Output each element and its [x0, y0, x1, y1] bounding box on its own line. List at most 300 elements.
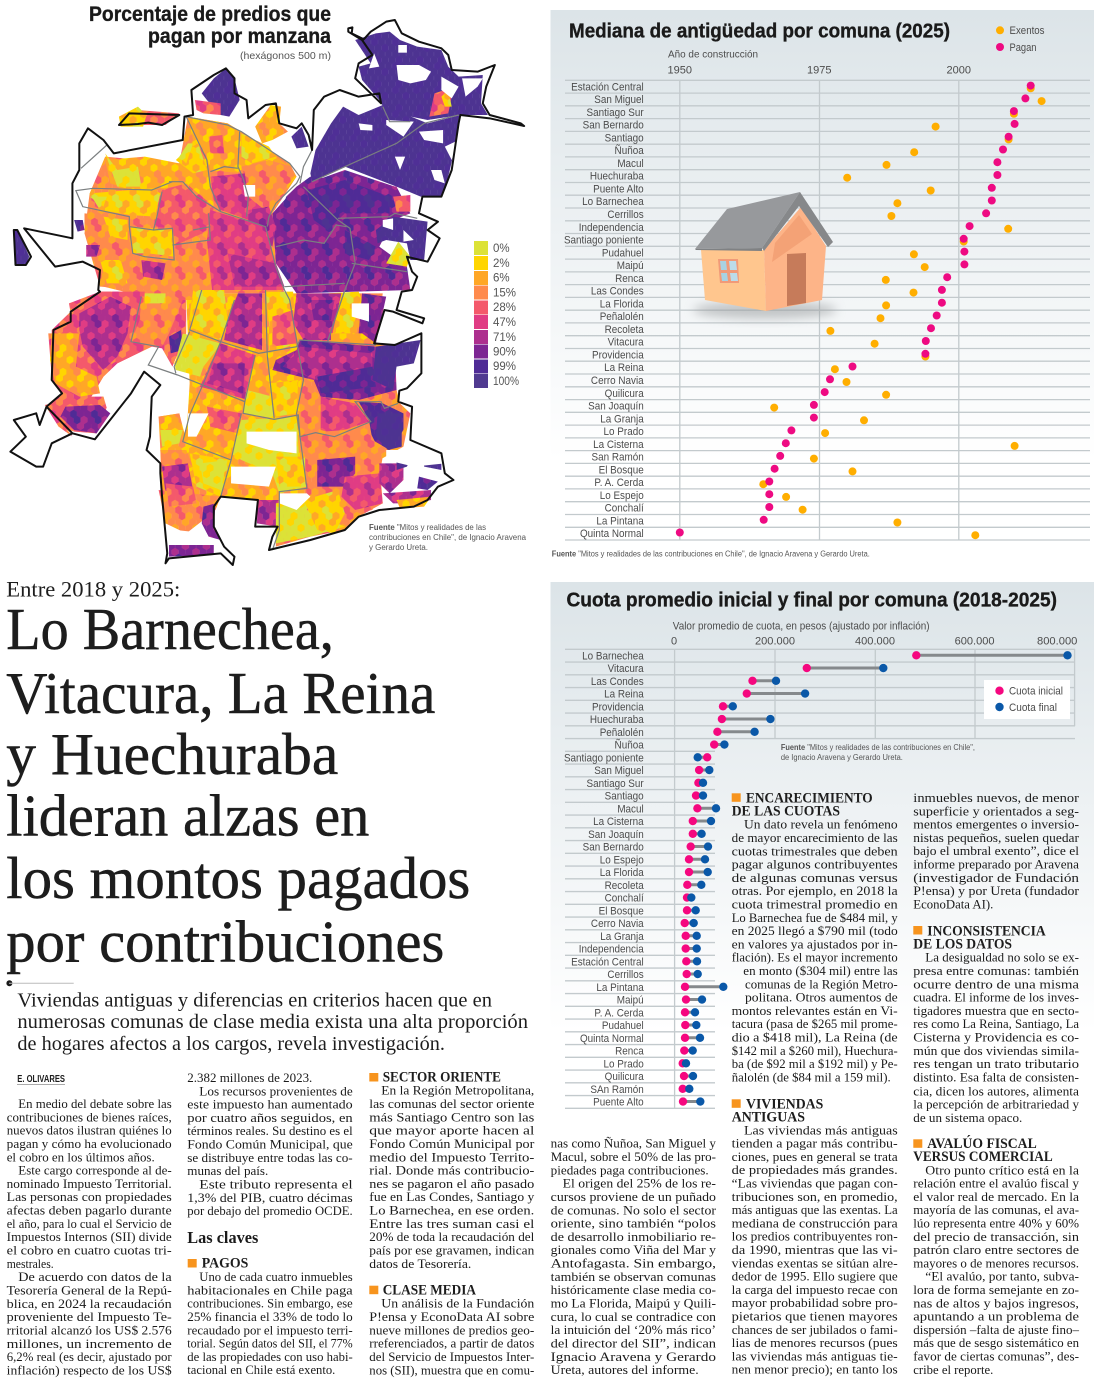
text column 1: blica, en 2024 la recaudación	[7, 1296, 172, 1311]
commune labels: Independencia	[579, 222, 644, 234]
text column 1: pagan y cómo ha evolucionado	[7, 1136, 172, 1151]
commune labels: Santiago Sur	[587, 778, 644, 790]
commune labels: Estación Central	[571, 957, 644, 968]
subheading: VIVIENDAS ANTIGUAS: VIVIENDAS	[746, 1096, 823, 1112]
text column 4: Antofagasta. Sin embargo,	[551, 1256, 716, 1270]
commune labels: Quilicura	[605, 1072, 644, 1083]
commune labels: Pudahuel	[602, 248, 644, 259]
commune labels: Lo Espejo	[600, 855, 644, 866]
commune labels: El Bosque	[599, 906, 644, 917]
chart legend: Cuota final	[1009, 702, 1057, 714]
text column 4: históricamente clase media co-	[551, 1282, 716, 1297]
subheading: VIVIENDAS ANTIGUAS	[732, 1096, 823, 1126]
kicker: Entre 2018 y 2025:	[6, 577, 180, 602]
commune labels: Ñuñoa	[615, 144, 644, 157]
axis labels: Valor promedio de cuota, en pesos (ajustado por inflación)	[673, 620, 930, 632]
commune boundaries	[76, 107, 459, 550]
text column 5: ñalolén (de $84 mil a 159 mil).	[732, 1069, 891, 1084]
commune labels: Maipú	[617, 995, 644, 1007]
text column 5: tribuciones son, en promedio,	[732, 1189, 898, 1204]
commune labels: La Reina	[604, 363, 644, 374]
text column 3: P!ensa y EconoData AI sobre	[369, 1309, 535, 1324]
commune labels: La Florida	[600, 299, 644, 311]
text column 5: tacura (pasa de $265 mil prome-	[732, 1016, 898, 1031]
map title	[89, 3, 331, 62]
commune labels: San Joaquín	[588, 401, 644, 413]
legend: Pagan	[1010, 42, 1036, 54]
text column 3: fue en Las Condes, Santiago y	[369, 1189, 535, 1204]
text column 1: De acuerdo con datos de la	[18, 1269, 172, 1284]
text column 1: el cobro en cuatro cuotas tri-	[7, 1242, 172, 1258]
text column 5: las viviendas más antiguas tie-	[732, 1348, 898, 1363]
text column 6: apuntando a un problema de	[913, 1309, 1079, 1324]
map legend: 47%	[493, 317, 516, 329]
text column 5: cuota trimestral promedio en	[732, 896, 898, 912]
text column 5: ciones, pues en general se trata	[732, 1149, 898, 1164]
text column 3	[369, 1070, 535, 1377]
text column 1: nominado Impuesto Territorial.	[7, 1176, 172, 1191]
commune labels: Puente Alto	[593, 184, 644, 196]
text column 1: millones, un incremento de	[7, 1336, 172, 1351]
commune labels: Lo Espejo	[600, 490, 644, 502]
text column 4: Ureta, autores del informe.	[551, 1362, 699, 1377]
commune labels: Estación Central	[571, 82, 644, 93]
commune labels: Santiago poniente	[564, 753, 644, 764]
text column 4: cursos proviene de un puñado	[551, 1189, 716, 1204]
legend: Exentos	[1010, 25, 1045, 37]
text column 6: nistas pequeños, suelen quedar	[913, 830, 1080, 845]
commune labels: La Granja	[600, 414, 644, 425]
axis labels: 1950	[668, 64, 692, 76]
text column 1: Impuestos Internos (SII) divide	[7, 1229, 172, 1244]
text column 6: lúo representa entre 40% y 60%	[913, 1216, 1079, 1230]
text column 6: superficie y orientados a seg-	[913, 803, 1079, 818]
axis labels: 400.000	[855, 635, 895, 647]
text column 5: dio a $418 mil), La Reina (de	[732, 1030, 898, 1044]
text column 6: informe preparado por Aravena	[913, 856, 1079, 872]
text column 5: “Las viviendas que pagan con-	[732, 1176, 898, 1190]
text column 2: de las propiedades con uso habi-	[187, 1349, 353, 1364]
commune labels: Santiago	[605, 133, 644, 145]
text column 2: Los recursos provenientes de	[199, 1083, 353, 1098]
chart source	[781, 743, 975, 762]
text column 4	[551, 1136, 717, 1377]
text column 5: nen menor precio); en tanto los	[732, 1362, 898, 1377]
text column 6: distinto. Esa falta de consisten-	[913, 1069, 1079, 1084]
text column 5: politana. Otros aumentos de	[745, 990, 898, 1005]
text column 2: recaudado por el impuesto terri-	[187, 1322, 353, 1337]
text column 3: del Servicio de Impuestos Inter-	[369, 1349, 534, 1364]
axis labels: 2000	[946, 64, 971, 76]
text column 2: 1,3% del PIB, cuatro décimas	[187, 1190, 353, 1205]
commune labels: Recoleta	[605, 880, 644, 892]
text column 2: 25% financia el 33% de todo lo	[187, 1309, 353, 1324]
text column 3: país por ese gravamen, indican	[369, 1242, 535, 1258]
text column 5: los predios contribuyentes ron-	[732, 1229, 898, 1244]
commune labels: Cerro Navia	[591, 919, 644, 930]
text column 6: res como La Reina, Santiago, La	[913, 1016, 1079, 1031]
subheading: Las claves: Las claves	[187, 1228, 259, 1247]
panel: median building age by commune	[550, 10, 1094, 559]
text column 5: flación). Es el mayor incremento	[732, 950, 898, 965]
commune labels: Lo Barnechea	[582, 197, 644, 208]
text column 6: ocurre dentro de una misma	[913, 976, 1079, 991]
text column 4: gionales como Viña del Mar y	[551, 1242, 717, 1257]
text column 5: tienden a pagar más contribu-	[732, 1136, 898, 1151]
text column 1	[7, 1096, 172, 1377]
headline	[6, 596, 470, 975]
text column 5: mediana de construcción para	[732, 1215, 898, 1230]
commune labels: Peñalolén	[600, 727, 644, 739]
text column 6: Otro punto crítico está en la	[925, 1162, 1079, 1177]
text column 1: rritorial alcanzó los US$ 2.576	[7, 1322, 172, 1337]
commune labels: San Bernardo	[583, 120, 644, 132]
text column 3: En la Región Metropolitana,	[381, 1083, 534, 1098]
text column 6: más que de sesgo sistemático en	[913, 1335, 1079, 1350]
commune labels: La Reina	[604, 689, 644, 701]
commune labels: Santiago	[605, 791, 644, 803]
hexagon choropleth map	[10, 20, 524, 565]
axis labels: 600.000	[955, 635, 995, 647]
text column 5	[732, 791, 898, 1377]
text column 5: en monto ($304 mil) entre las	[743, 963, 898, 978]
map title: Porcentaje de predios que	[89, 3, 331, 26]
text column 3: Fondo Común Municipal por	[369, 1136, 535, 1151]
text column 4: de comunas. No solo el sector	[551, 1202, 717, 1217]
text column 1: Este cargo corresponde al de-	[18, 1163, 172, 1178]
commune labels: Maipú	[617, 261, 644, 272]
text column 4: mo La Florida, Maipú y Quili-	[551, 1296, 716, 1310]
colour zones	[14, 32, 488, 557]
commune labels: La Cisterna	[593, 439, 644, 451]
text column 5: Las viviendas más antiguas	[744, 1122, 898, 1137]
text column 6: lora de forma semejante en zo-	[913, 1282, 1079, 1297]
commune labels: Quinta Normal	[580, 529, 644, 540]
text column 5: da 1990, mientras que las vi-	[732, 1242, 898, 1257]
map legend	[474, 241, 519, 388]
text column 4: oriente, sino también “polos	[551, 1216, 716, 1231]
text column 3: Entre las tres suman casi el	[369, 1216, 535, 1231]
text column 2: por cuatro años seguidos, en	[187, 1110, 353, 1125]
text column 5: chances de ser jubilados o fami-	[732, 1322, 898, 1337]
text column 4: nas como Ñuñoa, San Miguel y	[551, 1136, 717, 1151]
map legend: 71%	[493, 332, 516, 344]
text column 6: bajo el umbral exento”, dice el	[913, 843, 1079, 858]
commune labels: Santiago Sur	[587, 107, 644, 119]
text column 6: EconoData AI).	[913, 896, 993, 911]
commune labels: La Pintana	[596, 516, 644, 528]
text column 2: contribuciones. Sin embargo, ese	[187, 1296, 353, 1311]
commune labels: Puente Alto	[593, 1097, 644, 1109]
commune labels: Huechuraba	[590, 171, 644, 183]
commune labels: La Florida	[600, 868, 644, 879]
chart title: Cuota promedio inicial y final por comuna (2018-2025)	[566, 590, 1057, 612]
map legend: 2%	[493, 258, 510, 270]
text column 4: cura, lo cual se contradice con	[551, 1309, 717, 1324]
text column 3: más Santiago Centro son las	[369, 1109, 534, 1124]
text column 2: este impuesto han aumentado	[187, 1097, 353, 1112]
commune labels: Huechuraba	[590, 715, 644, 726]
commune labels: Conchalí	[605, 503, 644, 515]
text column 2: por debajo del promedio OCDE.	[187, 1203, 353, 1218]
text column 1: Tesorería General de la Repú-	[7, 1282, 172, 1298]
text column 5: pietarios que tienen mayores	[732, 1308, 898, 1324]
commune labels: Ñuñoa	[615, 738, 644, 752]
text column 4: también se observan comunas	[551, 1269, 716, 1284]
text column 4: la intuición del ‘20% más rico’	[551, 1322, 716, 1337]
map source: Fuente "Mitos y realidades de las	[369, 523, 486, 532]
map legend: 90%	[493, 346, 516, 358]
text column 6: nas de altos y bajos ingresos,	[913, 1295, 1079, 1310]
empty cells without data	[162, 45, 483, 543]
map legend: 99%	[493, 361, 516, 373]
commune labels: Vitacura	[608, 337, 644, 349]
map title: pagan por manzana	[148, 25, 331, 48]
text column 3: nes se pagaron el año pasado	[369, 1176, 534, 1191]
text column 3: nueve millones de predios geo-	[369, 1322, 534, 1337]
subheading: INCONSISTENCIA DE LOS DATOS: DE LOS DATOS	[913, 937, 1012, 953]
text column 6: “El avalúo, por tanto, subva-	[925, 1269, 1079, 1284]
headline: y Huechuraba	[6, 721, 338, 787]
commune labels: Vitacura	[608, 664, 644, 675]
headline: Lo Barnechea,	[6, 596, 334, 662]
deck: de hogares afectos a los cargos, revela investigación.	[17, 1034, 445, 1055]
text column 3: 20% de toda la recaudación del	[369, 1229, 535, 1244]
text column 5: de mayor encarecimiento de las	[732, 830, 898, 845]
subheading: CLASE MEDIA: CLASE MEDIA	[383, 1283, 476, 1299]
text column 1: nuevos datos ilustran quiénes lo	[7, 1123, 172, 1138]
text column 6: mentos emergentes o inversio-	[913, 817, 1079, 832]
text column 1: En medio del debate sobre las	[18, 1096, 172, 1111]
commune labels: Macul	[617, 158, 644, 170]
text column 2: Uno de cada cuatro inmuebles	[199, 1269, 353, 1284]
text column 5: montos relevantes están en Vi-	[732, 1003, 898, 1018]
commune labels	[564, 651, 644, 1109]
commune labels: Pudahuel	[602, 1021, 644, 1032]
commune labels: La Pintana	[596, 982, 644, 994]
map legend: 15%	[493, 288, 516, 300]
text column 5: dedor de 1995. Ello sugiere que	[732, 1269, 898, 1284]
headline: lideran alzas en	[6, 783, 369, 849]
text column 6: el valor real de mercado. En la	[913, 1189, 1079, 1204]
text column 2	[187, 1070, 353, 1377]
subheading: VIVIENDAS ANTIGUAS: ANTIGUAS	[732, 1110, 805, 1126]
text column 6: cribe el reporte.	[913, 1362, 993, 1377]
text column 5: viendas exentas se sitúan alre-	[732, 1255, 898, 1270]
headline: los montos pagados	[6, 845, 470, 911]
text column 6: favor de ciertas comunas”, des-	[913, 1348, 1079, 1364]
commune labels: Providencia	[592, 350, 644, 362]
text column 1: inflación) respecto de los US$	[7, 1362, 172, 1377]
chart title: Mediana de antigüedad por comuna (2025)	[569, 20, 950, 42]
subheading: PAGOS: PAGOS	[202, 1255, 248, 1271]
map source: y Gerardo Ureta.	[369, 543, 428, 552]
commune labels: Quinta Normal	[580, 1033, 644, 1045]
connectors between start and end values	[683, 655, 1068, 1102]
text column 4: piedades paga contribuciones.	[551, 1162, 709, 1177]
axis labels	[671, 620, 1077, 647]
commune labels: Conchalí	[605, 893, 644, 905]
text column 3: medio del Impuesto Territo-	[369, 1149, 534, 1164]
text column 2: se distribuye entre todas las co-	[187, 1150, 353, 1165]
axis labels: 800.000	[1037, 635, 1077, 647]
commune labels: San Joaquín	[588, 829, 644, 841]
headline: por contribuciones	[6, 909, 444, 975]
text column 6: mún que dos viviendas simila-	[913, 1043, 1079, 1058]
text column 5: $142 mil a $260 mil), Huechura-	[732, 1043, 898, 1058]
text column 6: de un sistema opaco.	[913, 1110, 1022, 1125]
final value dots	[682, 651, 1072, 1106]
text column 3: Un análisis de la Fundación	[381, 1296, 535, 1311]
text column 6: mayores o de menores recursos.	[913, 1255, 1079, 1270]
text column 4: del director del SII”, indican	[551, 1336, 717, 1350]
chart legend	[984, 680, 1070, 719]
text column 3: Lo Barnechea, en ese orden.	[369, 1202, 534, 1218]
text column 6: Cisterna y Providencia es co-	[913, 1030, 1079, 1044]
text column 6: del precio de transacción, sin	[913, 1229, 1080, 1244]
text column 4: Macul, sobre el 50% de las pro-	[551, 1149, 716, 1164]
chart legend: Cuota inicial	[1009, 686, 1063, 698]
text column 6: presa entre comunas: también	[913, 963, 1080, 978]
commune labels	[564, 82, 644, 540]
text column 6: P!ensa) y por Ureta (fundador	[913, 883, 1080, 898]
map source	[369, 523, 527, 552]
text column 1: el año, para lo cual el Servicio de	[7, 1216, 172, 1231]
text column 1: mestrales.	[7, 1256, 54, 1271]
subheading: SECTOR ORIENTE: SECTOR ORIENTE	[383, 1070, 501, 1086]
text column 6: dispersión –falta de ajuste fino–	[913, 1322, 1079, 1337]
commune labels: Renca	[615, 1046, 644, 1058]
text column 5: la carga del impuesto recae con	[732, 1282, 898, 1297]
subheading: AVALÚO FISCAL VERSUS COMERCIAL: VERSUS COMERCIAL	[913, 1149, 1053, 1165]
commune labels: La Cisterna	[593, 817, 644, 828]
text column 6: res tengan un trato tributario	[913, 1056, 1079, 1071]
icon: house illustration	[693, 192, 837, 319]
commune labels: Las Condes	[591, 676, 644, 688]
text column 5: Lo Barnechea fue de $484 mil, y	[732, 910, 898, 925]
text column 6: tigadores muestra que en secto-	[913, 1003, 1079, 1018]
commune labels: San Bernardo	[583, 842, 644, 854]
commune labels: Lo Prado	[604, 1059, 644, 1070]
pagan dots	[676, 82, 1035, 536]
commune labels: Recoleta	[605, 324, 644, 336]
text column 4: El origen del 25% de los re-	[563, 1176, 716, 1191]
text column 5: pagar algunos contribuyentes	[732, 857, 898, 872]
text column 1: afectas deben pagarlo durante	[7, 1203, 172, 1218]
chart source: Fuente "Mitos y realidades de las contribuciones en Chile", de Ignacio Aravena y Gerardo Ureta.	[552, 550, 870, 559]
subheading: INCONSISTENCIA DE LOS DATOS: INCONSISTENCIA	[927, 923, 1046, 939]
axis labels: Año de construcción	[668, 48, 758, 60]
panel: map of percentage of properties paying per block	[10, 3, 527, 565]
panel background	[550, 10, 1094, 460]
text column 3: que mayor aporte hacen al	[369, 1123, 535, 1138]
subheading: ENCARECIMIENTO DE LAS CUOTAS: ENCARECIMIENTO	[746, 791, 873, 807]
commune labels: SAn Ramón	[590, 1084, 644, 1096]
text column 6: relación entre el avalúo fiscal y	[913, 1176, 1080, 1191]
text column 2: torial. Según datos del SII, el 77%	[187, 1336, 353, 1351]
commune labels: San Miguel	[594, 95, 644, 106]
text column 4: de desarrollo inmobiliario re-	[551, 1229, 716, 1244]
text column 2: Fondo Común Municipal, que	[187, 1137, 353, 1152]
byline: E. OLIVARES	[17, 1074, 65, 1085]
deck: numerosas comunas de clase media exista una alta proporción	[17, 1012, 528, 1033]
text column 3: rial. Donde más contribucio-	[369, 1163, 534, 1178]
commune labels: Renca	[615, 273, 644, 285]
map source: contribuciones en Chile", de Ignacio Aravena	[369, 533, 527, 542]
text column 6	[913, 790, 1080, 1377]
text column 5: mayor probabilidad sobre pro-	[732, 1295, 898, 1310]
text column 2: tacional en Chile está exento.	[187, 1362, 335, 1377]
text column 6: inmuebles nuevos, de menor	[913, 790, 1080, 805]
initial value dots	[678, 651, 920, 1106]
chart source: Fuente "Mitos y realidades de las contribuciones en Chile",	[781, 743, 975, 752]
subheading: ENCARECIMIENTO DE LAS CUOTAS: DE LAS CUOTAS	[732, 804, 840, 820]
map legend: 0%	[493, 243, 510, 255]
commune labels: Cerrillos	[607, 210, 644, 221]
text column 6: (investigador de Fundación	[913, 870, 1080, 885]
commune labels: Cerro Navia	[591, 376, 644, 387]
subheading: AVALÚO FISCAL VERSUS COMERCIAL: AVALÚO FISCAL	[927, 1135, 1037, 1152]
text column 1: contribuciones de bienes raíces,	[7, 1109, 172, 1124]
text column 5: ba (de $92 mil a $192 mil) y Pe-	[732, 1056, 898, 1071]
text column 5: comunas de la Región Metro-	[745, 976, 898, 991]
text column 3: datos de Tesorería.	[369, 1256, 471, 1271]
text column 6: cuadra. El informe de los inves-	[913, 990, 1079, 1005]
deck	[17, 991, 528, 1055]
map title: (hexágonos 500 m)	[240, 50, 331, 62]
text column 3: nos (SII), muestra que en comu-	[369, 1362, 534, 1377]
text column 5: cuotas trimestrales que deben	[732, 843, 898, 858]
text column 6: cia, dicen los autores, alimenta	[913, 1083, 1079, 1098]
text column 4: Ignacio Aravena y Gerardo	[551, 1349, 716, 1364]
axis labels: 200.000	[755, 635, 795, 647]
text column 1: proveniente del Impuesto Te-	[7, 1309, 172, 1324]
text column 2: habitacionales en Chile paga	[187, 1282, 353, 1297]
commune labels: P. A. Cerda	[594, 1008, 644, 1019]
map legend: 100%	[493, 376, 519, 388]
text column 5: de propiedades más grandes.	[732, 1162, 898, 1177]
subheading: ENCARECIMIENTO DE LAS CUOTAS	[732, 791, 873, 820]
commune labels: Peñalolén	[600, 312, 644, 323]
text column 2: 2.382 millones de 2023.	[187, 1070, 312, 1085]
text column 5: en valores ya ajustados por in-	[732, 936, 898, 951]
text column 5: Un dato revela un fenómeno	[744, 817, 898, 832]
commune labels: Macul	[617, 804, 644, 815]
commune labels: Santiago poniente	[564, 235, 644, 247]
headline: Vitacura, La Reina	[6, 660, 435, 726]
commune labels: Cerrillos	[607, 970, 644, 981]
axis labels: 1975	[807, 64, 832, 76]
commune labels: San Miguel	[594, 766, 644, 777]
commune labels: San Ramón	[591, 452, 644, 464]
text column 3: rreferenciados, a partir de datos	[369, 1336, 534, 1351]
grid	[565, 80, 1090, 540]
text column 6: la percepción de arbitrariedad y	[913, 1097, 1080, 1112]
text column 1: Las personas con propiedades	[7, 1189, 172, 1204]
commune labels: El Bosque	[599, 465, 644, 477]
commune labels: Lo Barnechea	[582, 651, 644, 662]
axis labels	[668, 48, 971, 76]
divider with dot	[6, 980, 74, 986]
text column 2: munas del país.	[187, 1163, 268, 1178]
chart source: de Ignacio Aravena y Gerardo Ureta.	[781, 753, 903, 762]
commune labels: Las Condes	[591, 286, 644, 298]
text column 1: 6,2% real (es decir, ajustado por	[7, 1349, 172, 1364]
text column 5: de algunas comunas versus	[732, 870, 898, 885]
subheading: AVALÚO FISCAL VERSUS COMERCIAL	[913, 1135, 1053, 1165]
commune labels: Quilicura	[605, 388, 644, 400]
commune labels: Lo Prado	[604, 427, 644, 438]
